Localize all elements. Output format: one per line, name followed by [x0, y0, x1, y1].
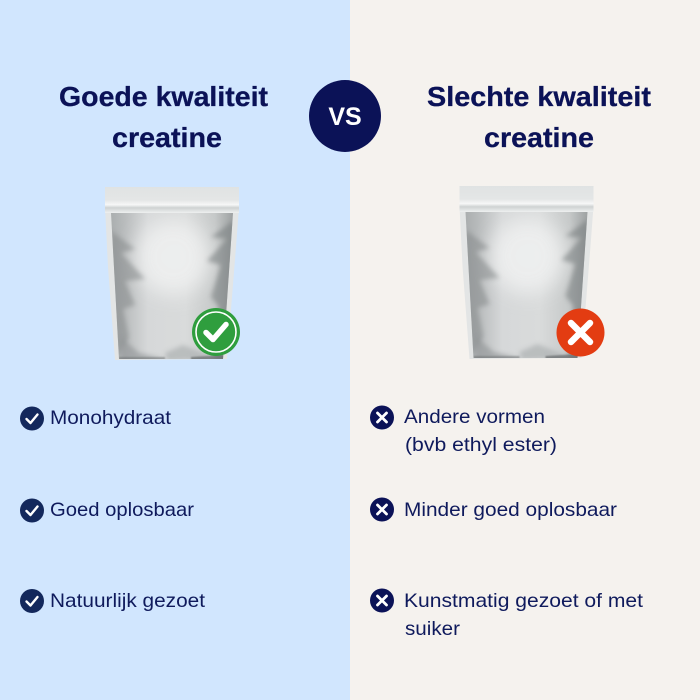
list item: Andere vormen: (bvb ethyl ester): [405, 434, 557, 456]
list item: Goed oplosbaar: Goed oplosbaar: [50, 499, 195, 521]
heading: bad quality: creatine: [484, 122, 594, 153]
list item: Kunstmatig gezoet: [370, 588, 644, 640]
list item: Minder goed oplosbaar: Minder goed oplosbaar: [404, 499, 618, 521]
image: bad pouch: [460, 186, 594, 361]
icon: red cross badge: [556, 308, 604, 356]
list item: Monohydraat: Monohydraat: [50, 407, 172, 429]
list item: Kunstmatig gezoet: suiker: [405, 618, 461, 640]
list item: Natuurlijk gezoet: Natuurlijk gezoet: [50, 590, 206, 612]
image: good pouch: [105, 187, 239, 362]
heading: good quality: Goede kwaliteit: [59, 81, 268, 112]
list item: Andere vormen: [370, 406, 557, 456]
list item: Kunstmatig gezoet: Kunstmatig gezoet of met: [404, 590, 644, 612]
list item: Monohydraat: [20, 406, 172, 430]
panel: good quality background: [0, 0, 350, 700]
panel: bad quality background: [350, 0, 700, 700]
heading: good quality: creatine: [112, 122, 222, 153]
vs badge: [309, 80, 381, 152]
icon: green check badge: [192, 308, 240, 356]
heading: good quality: [59, 81, 268, 153]
list item: Andere vormen: Andere vormen: [404, 406, 545, 428]
heading: bad quality: [427, 81, 651, 153]
heading: bad quality: Slechte kwaliteit: [427, 81, 651, 112]
vs badge: VS: [328, 103, 362, 131]
